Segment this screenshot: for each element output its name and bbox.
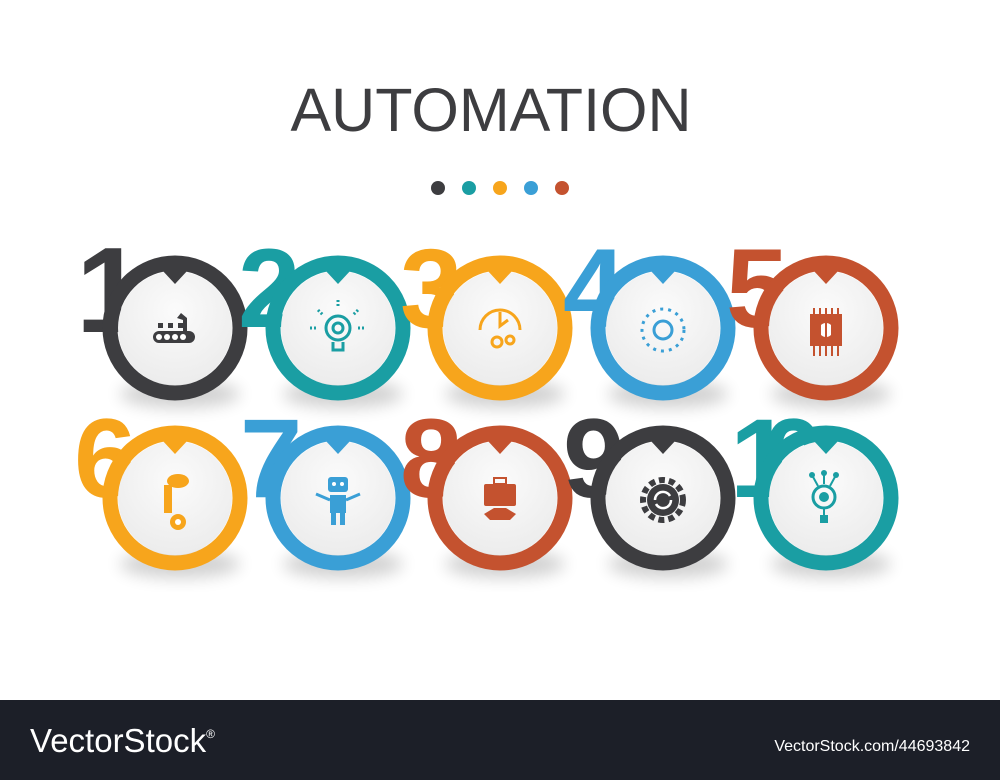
item 9: 9	[563, 396, 625, 521]
item 1: 1	[76, 222, 144, 358]
icon: briefcase handshake	[484, 478, 516, 520]
item 1	[76, 222, 240, 408]
item 3: 3	[400, 226, 462, 351]
icon: conveyor	[153, 313, 195, 343]
icon: clock gears	[480, 310, 520, 347]
icon: gear refresh	[643, 480, 683, 520]
item 2	[238, 226, 403, 408]
item 2: 2	[238, 226, 300, 351]
footer	[0, 700, 1000, 780]
item 5	[726, 226, 891, 408]
item 8: 8	[400, 396, 462, 521]
item 6	[74, 396, 240, 578]
icon: chip	[810, 308, 842, 356]
footer: ®	[206, 727, 215, 741]
item 9	[563, 396, 728, 578]
icon: bulb gear	[310, 300, 366, 350]
item 5: 5	[726, 226, 788, 351]
icon: process	[809, 470, 839, 523]
item 10: 10	[730, 396, 820, 521]
title: AUTOMATION	[290, 76, 692, 144]
icon: gear network	[642, 309, 684, 351]
item 7	[240, 396, 403, 578]
dots	[431, 181, 569, 195]
footer: VectorStock	[30, 722, 206, 759]
item 6: 6	[74, 396, 136, 521]
item 10	[730, 396, 891, 578]
icon: factory	[164, 474, 189, 530]
footer: VectorStock.com/44693842	[774, 738, 970, 755]
item 4	[563, 226, 728, 408]
item 8	[400, 396, 565, 578]
item 4: 4	[563, 226, 625, 351]
item 3	[400, 226, 565, 408]
icon: robot	[316, 477, 360, 525]
item 7: 7	[240, 396, 302, 521]
